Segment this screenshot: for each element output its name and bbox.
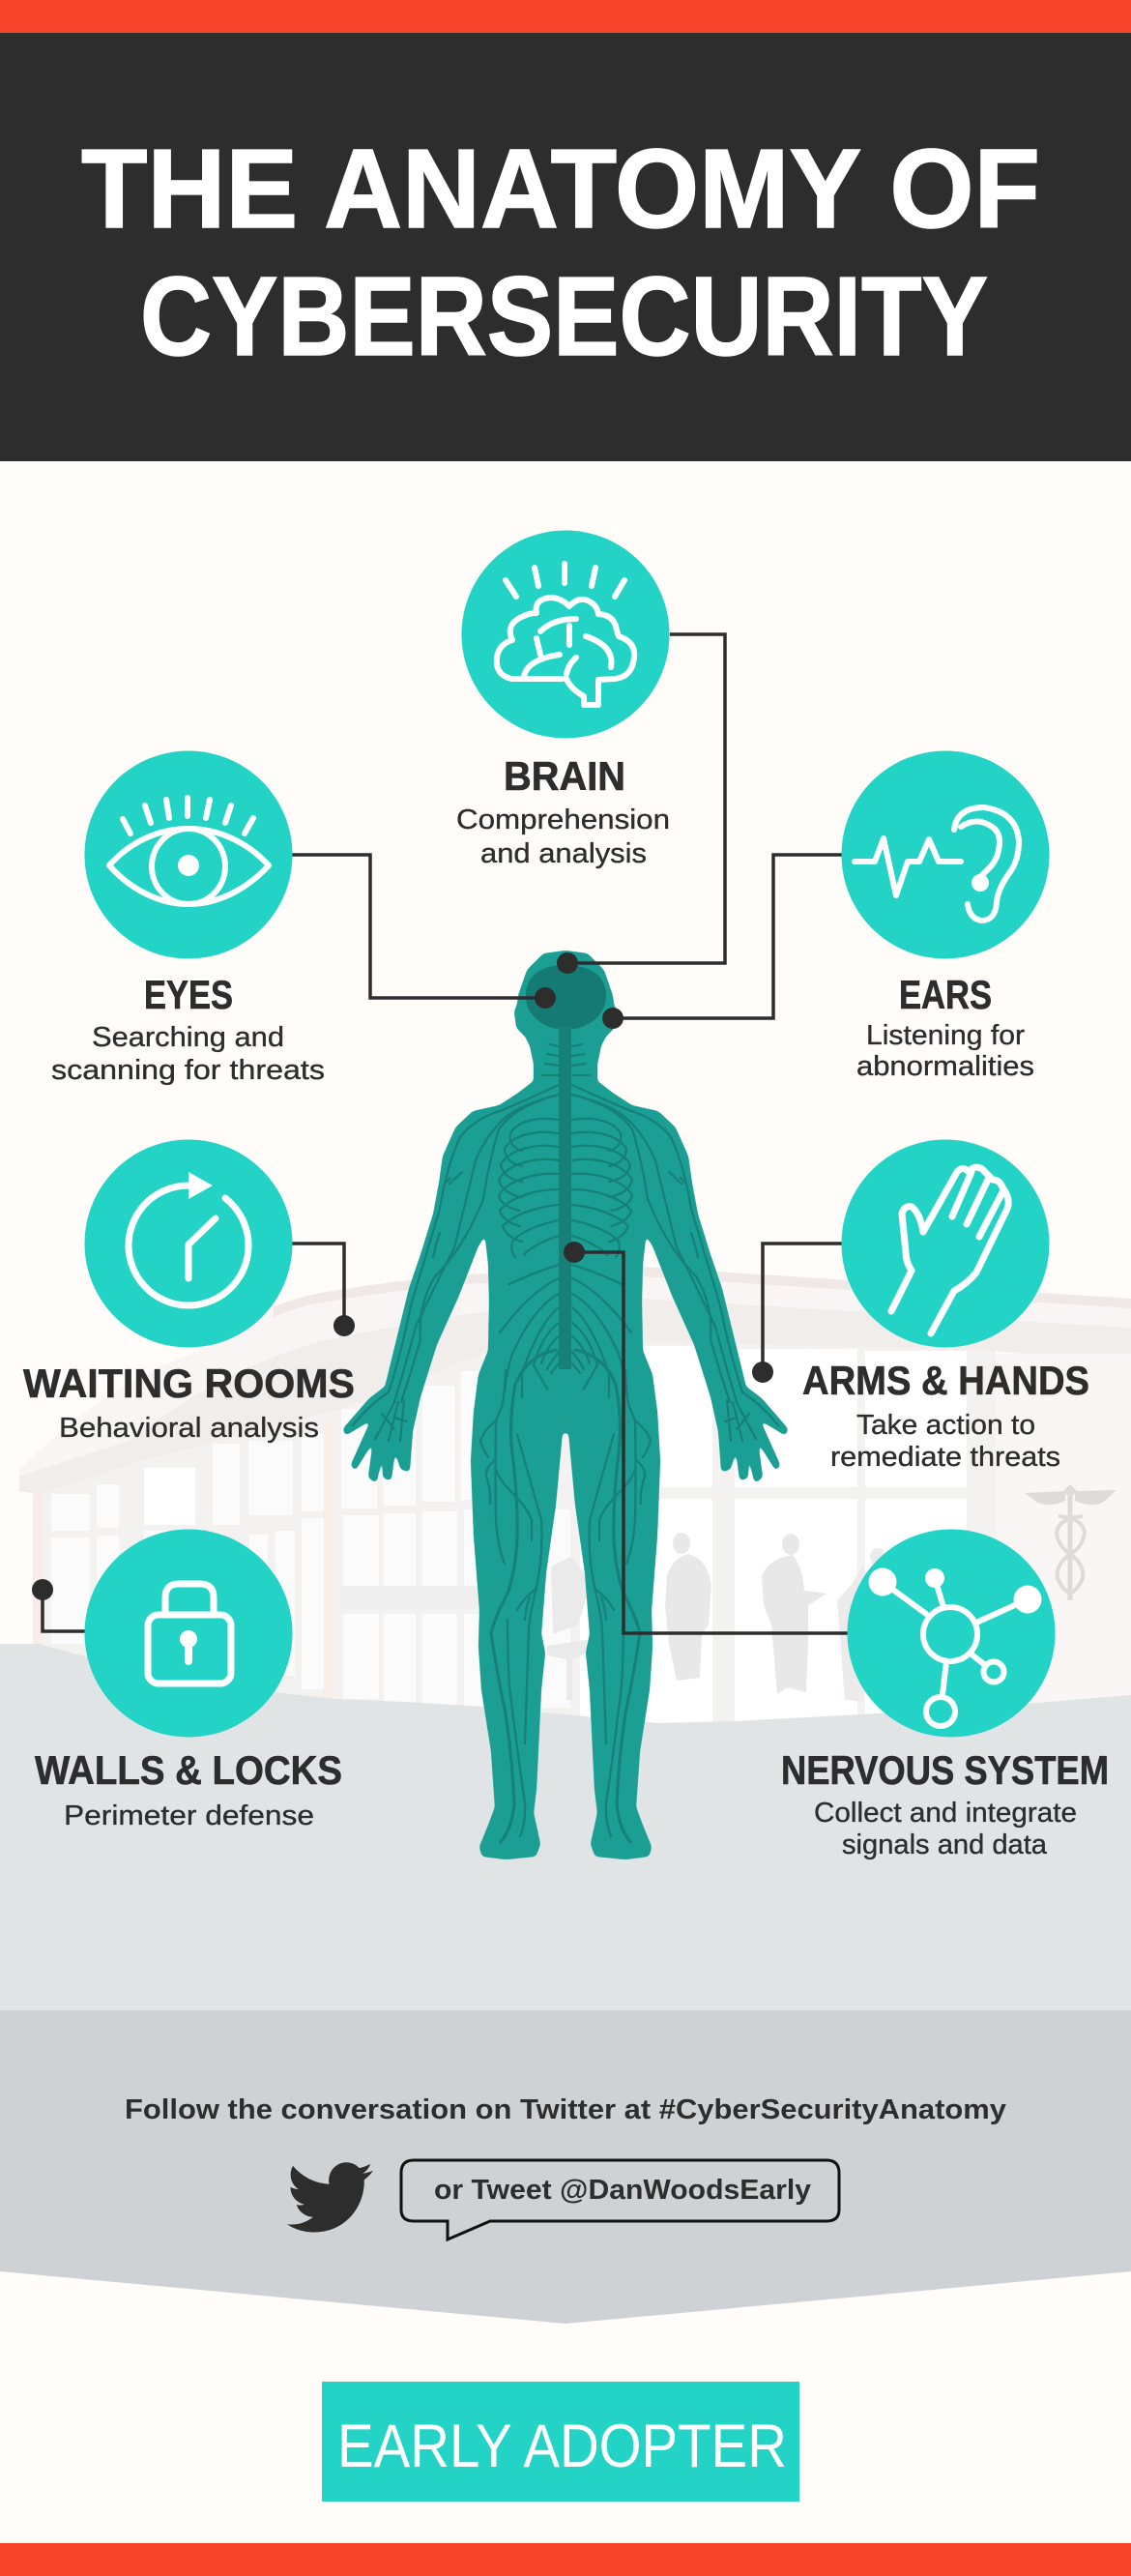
speech bubble: or Tweet @DanWoodsEarly [434,2175,811,2206]
background: medical building illustration [0,1267,1131,2021]
connector: ears [602,855,842,1029]
human body figure with nervous system [345,952,786,1858]
text: follow on twitter: Follow the conversation on Twitter at #CyberSecurityAnatomy [125,2094,1006,2125]
description: ears [856,1020,1034,1082]
panel: nervous system [781,1530,1109,1860]
icon: caduceus wall sign [1025,1484,1116,1600]
icon: twitter bird [287,2162,373,2232]
description: brain: and analysis [480,838,647,869]
description: ears: abnormalities [856,1051,1034,1082]
heading: brain: BRAIN [504,753,625,799]
panel: waiting rooms [23,1139,355,1444]
description: walls and locks: Perimeter defense [64,1800,314,1831]
icon: padlock [148,1584,231,1683]
logo: early adopter: EARLY ADOPTER [337,2413,787,2480]
description: waiting rooms: Behavioral analysis [59,1413,319,1444]
description: eyes: scanning for threats [51,1055,325,1086]
panel: eyes [51,750,325,1086]
description: nervous system: signals and data [842,1830,1048,1860]
connector: nervous system [564,1242,848,1633]
heading: walls and locks: WALLS & LOCKS [35,1747,342,1793]
header panel with title: THE ANATOMY OF [81,126,1040,251]
description: ears: Listening for [866,1020,1025,1051]
connector: eyes [292,855,556,1009]
heading: waiting rooms: WAITING ROOMS [23,1361,355,1406]
panel: brain [456,530,670,869]
panel: ears [841,750,1050,1082]
description: arms and hands: Take action to [856,1410,1035,1441]
bottom red bar [0,2543,1131,2576]
description: eyes: Searching and [92,1022,284,1053]
connector: arms and hands [752,1244,842,1383]
heading: ears: EARS [899,972,992,1017]
panel: arms and hands [802,1139,1089,1473]
panel: walls and locks [35,1530,342,1831]
heading: arms and hands: ARMS & HANDS [802,1358,1089,1403]
description: nervous system: Collect and integrate [814,1798,1077,1829]
top red bar [0,0,1131,33]
header panel with title: CYBERSECURITY [140,253,988,379]
description: brain [456,805,670,869]
description: eyes [51,1022,325,1086]
description: arms and hands: remediate threats [830,1442,1060,1473]
floor [0,1644,1131,2021]
logo: early adopter [322,2382,799,2502]
connector: brain [557,634,725,974]
description: brain: Comprehension [456,805,670,835]
header panel with title [0,33,1131,461]
icon: ear with signal [855,807,1019,921]
description: arms and hands [830,1410,1060,1473]
icon: brain [497,564,634,705]
icon: hand [891,1167,1008,1333]
connector: walls and locks [32,1579,85,1631]
description: nervous system [814,1798,1077,1860]
icon: eye [109,798,269,904]
connector: waiting rooms [292,1244,355,1336]
panel: twitter call to action [0,2010,1131,2324]
heading: eyes: EYES [144,972,233,1017]
speech bubble [401,2160,839,2239]
icon: network nodes [868,1568,1042,1726]
icon: clock [129,1172,248,1305]
